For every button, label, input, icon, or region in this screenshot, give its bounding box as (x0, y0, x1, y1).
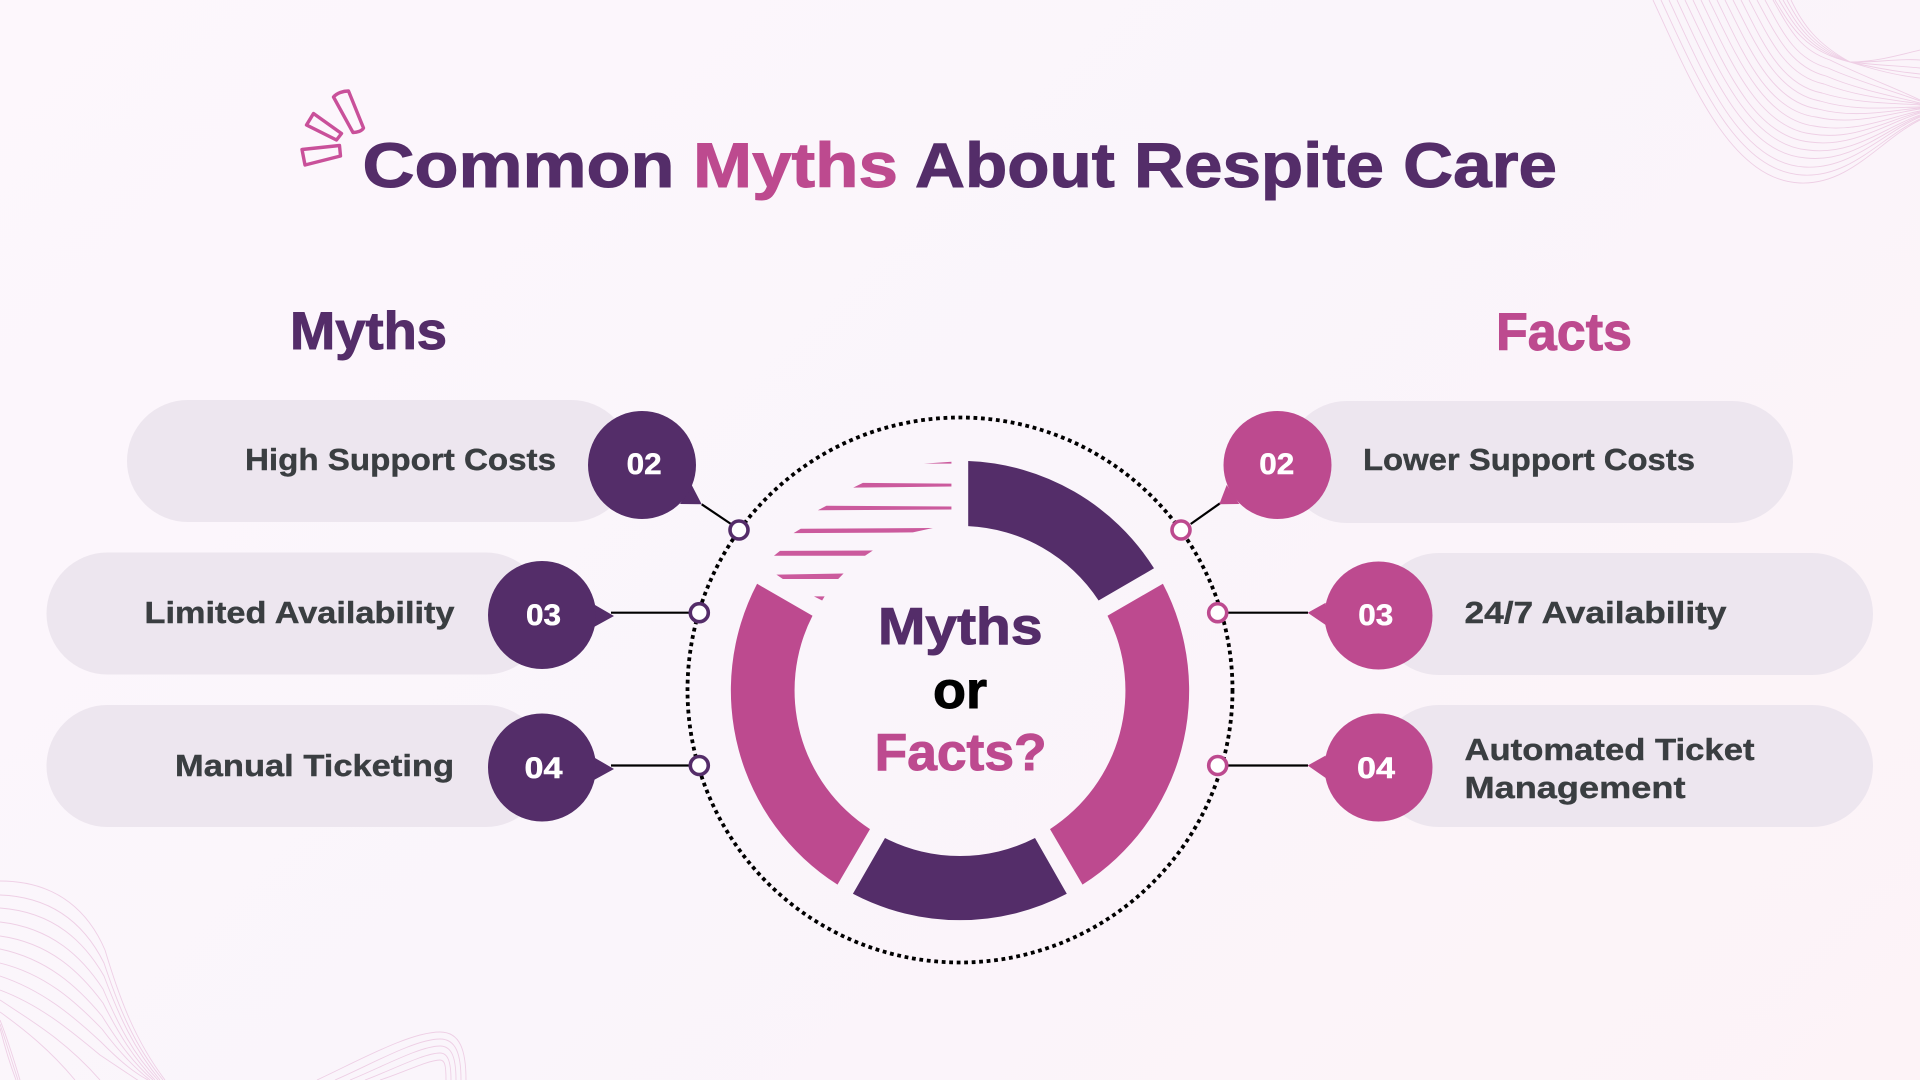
fact 04: automated ticket management: 04 (1357, 752, 1395, 785)
title: Common (362, 131, 674, 201)
decoration: bottom left waves (0, 881, 466, 1080)
segment: striped top left (774, 462, 951, 600)
segment: top right purple (968, 461, 1154, 600)
fact 02: lower support costs (1172, 401, 1793, 539)
myth 04: manual ticketing (46, 705, 708, 827)
myth 04: manual ticketing: 04 (524, 752, 563, 785)
myth 04: manual ticketing: Manual Ticketing (175, 748, 454, 783)
heading: myths: Myths (290, 302, 447, 361)
myth 03: limited availability (46, 552, 708, 674)
title: About Respite Care (915, 131, 1557, 201)
center text: or (933, 662, 987, 720)
segment: right pink (1050, 584, 1189, 885)
fact 03: 24/7 availability: 03 (1358, 599, 1393, 632)
center text: Facts? (875, 724, 1047, 782)
myth 02: high support costs (127, 400, 748, 539)
heading: facts: Facts (1496, 303, 1632, 362)
myth 02: high support costs: 02 (627, 448, 662, 481)
title (362, 131, 1557, 201)
fact 04: automated ticket management: Automated Ticket (1464, 732, 1754, 767)
myth 02: high support costs: High Support Costs (245, 442, 556, 477)
center text (875, 598, 1047, 782)
fact 04: automated ticket management (1209, 705, 1873, 827)
myth 03: limited availability: 03 (526, 599, 561, 632)
myth 03: limited availability: Limited Availability (144, 595, 455, 630)
title: Myths (693, 131, 898, 201)
dotted ring (688, 418, 1232, 962)
center text: Myths (878, 598, 1042, 656)
donut chart (731, 461, 1189, 920)
fact 02: lower support costs: Lower Support Costs (1363, 442, 1695, 477)
fact 03: 24/7 availability: 24/7 Availability (1464, 595, 1727, 630)
fact 03: 24/7 availability (1209, 553, 1873, 675)
decoration: top right waves (1653, 0, 1920, 183)
fact 04: automated ticket management: Management (1464, 770, 1686, 805)
fact 02: lower support costs: 02 (1259, 448, 1294, 481)
icon: title sparkle (302, 91, 364, 165)
segment: bottom purple (853, 838, 1067, 920)
segment: left pink (731, 584, 870, 885)
